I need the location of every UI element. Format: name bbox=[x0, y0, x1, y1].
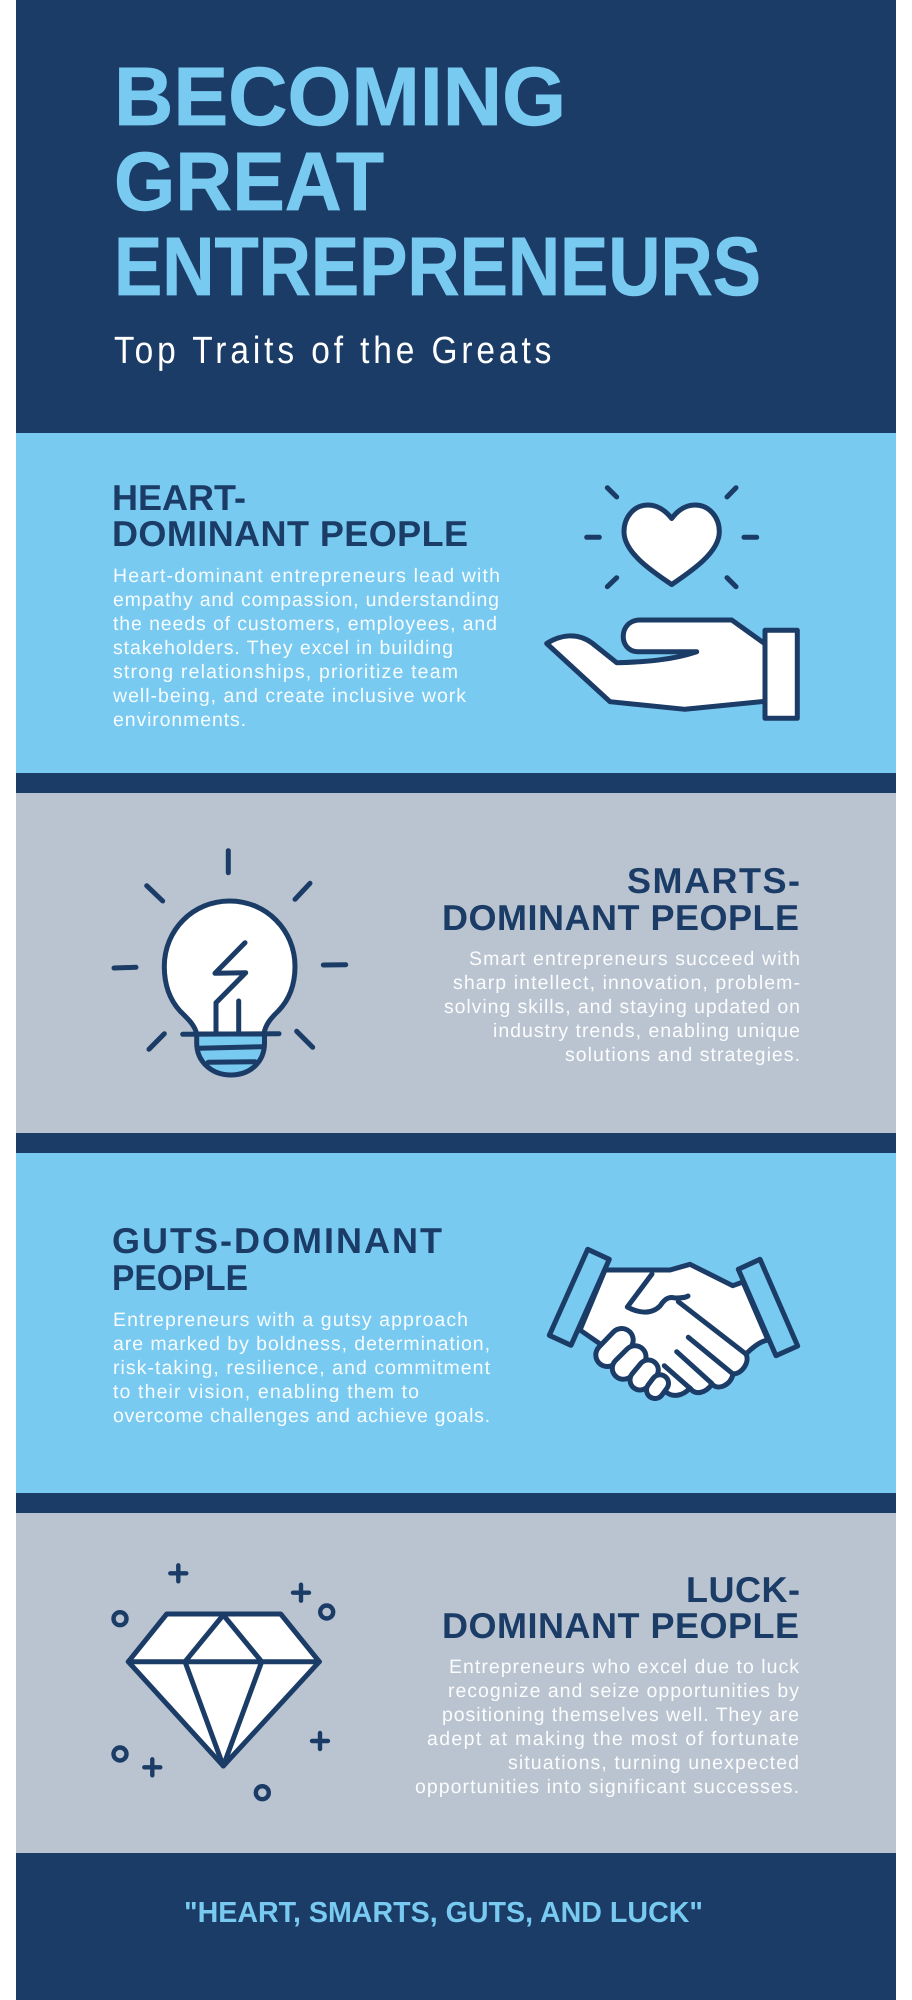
text block: guts-dominant description bbox=[113, 1309, 491, 1427]
subtitle: Top Traits of the Greats bbox=[114, 330, 551, 372]
icon: light bulb bbox=[114, 851, 346, 1075]
heading: heart-dominant bbox=[112, 477, 468, 554]
text block: heart-dominant description: empathy and compassion, understanding bbox=[113, 589, 499, 611]
text block: guts-dominant description: overcome challenges and achieve goals. bbox=[113, 1405, 490, 1427]
icon: diamond bbox=[114, 1565, 333, 1799]
divider band bbox=[16, 773, 896, 793]
heading: luck-dominant: LUCK- bbox=[686, 1569, 800, 1610]
title: ENTREPRENEURS bbox=[114, 220, 761, 313]
icon: handshake bbox=[549, 1249, 798, 1395]
title: BECOMING bbox=[114, 50, 566, 143]
heading: luck-dominant: DOMINANT PEOPLE bbox=[442, 1605, 799, 1646]
heading: guts-dominant bbox=[112, 1220, 442, 1298]
divider band bbox=[16, 1133, 896, 1153]
text block: luck-dominant description: opportunities into significant successes. bbox=[415, 1776, 799, 1798]
text block: guts-dominant description: Entrepreneurs with a gutsy approach bbox=[113, 1309, 468, 1331]
text block: guts-dominant description: risk-taking, resilience, and commitment bbox=[113, 1357, 491, 1379]
text block: smarts-dominant description: solutions and strategies. bbox=[565, 1044, 800, 1066]
text block: heart-dominant description bbox=[112, 565, 500, 731]
panel: heart-dominant people bbox=[16, 433, 896, 773]
heading: smarts-dominant bbox=[442, 860, 800, 938]
text block: luck-dominant description: adept at making the most of fortunate bbox=[427, 1728, 799, 1750]
text block: guts-dominant description: to their vision, enabling them to bbox=[113, 1381, 419, 1403]
text block: luck-dominant description: Entrepreneurs who excel due to luck bbox=[449, 1656, 799, 1678]
panel: guts-dominant people bbox=[16, 1153, 896, 1493]
heading: luck-dominant bbox=[442, 1569, 800, 1646]
panel: footer bbox=[16, 1853, 896, 2000]
heading: smarts-dominant: SMARTS- bbox=[627, 860, 800, 901]
text block: smarts-dominant description: solving skills, and staying updated on bbox=[444, 996, 800, 1018]
panel: luck-dominant people bbox=[16, 1513, 896, 1853]
text block: guts-dominant description: are marked by boldness, determination, bbox=[113, 1333, 490, 1355]
text block: luck-dominant description bbox=[415, 1656, 799, 1798]
heading: heart-dominant: DOMINANT PEOPLE bbox=[112, 513, 468, 554]
text block: luck-dominant description: recognize and seize opportunities by bbox=[448, 1680, 799, 1702]
text block: heart-dominant description: Heart-dominant entrepreneurs lead with bbox=[113, 565, 500, 587]
text block: heart-dominant description: stakeholders. They excel in building bbox=[113, 637, 453, 659]
text block: smarts-dominant description bbox=[444, 948, 800, 1066]
text block: luck-dominant description: situations, turning unexpected bbox=[508, 1752, 799, 1774]
title: GREAT bbox=[114, 135, 384, 228]
text block: heart-dominant description: strong relationships, prioritize team bbox=[113, 661, 458, 683]
footer quote: "HEART, SMARTS, GUTS, AND LUCK" bbox=[184, 1897, 703, 1929]
text block: heart-dominant description: environments. bbox=[113, 709, 246, 731]
title bbox=[114, 50, 761, 313]
panel: smarts-dominant people bbox=[16, 793, 896, 1133]
panel: header bbox=[16, 0, 896, 433]
divider band bbox=[16, 1493, 896, 1513]
text block: smarts-dominant description: Smart entrepreneurs succeed with bbox=[469, 948, 800, 970]
heading: guts-dominant: PEOPLE bbox=[112, 1257, 248, 1298]
heading: guts-dominant: GUTS-DOMINANT bbox=[112, 1220, 442, 1261]
text block: heart-dominant description: the needs of customers, employees, and bbox=[113, 613, 497, 635]
text block: heart-dominant description: well-being, and create inclusive work bbox=[112, 685, 466, 707]
text block: smarts-dominant description: sharp intellect, innovation, problem- bbox=[453, 972, 800, 994]
icon: heart in open hand bbox=[547, 488, 797, 718]
heading: smarts-dominant: DOMINANT PEOPLE bbox=[442, 897, 799, 938]
text block: smarts-dominant description: industry trends, enabling unique bbox=[493, 1020, 800, 1042]
text block: luck-dominant description: positioning themselves well. They are bbox=[442, 1704, 799, 1726]
heading: heart-dominant: HEART- bbox=[112, 477, 246, 518]
